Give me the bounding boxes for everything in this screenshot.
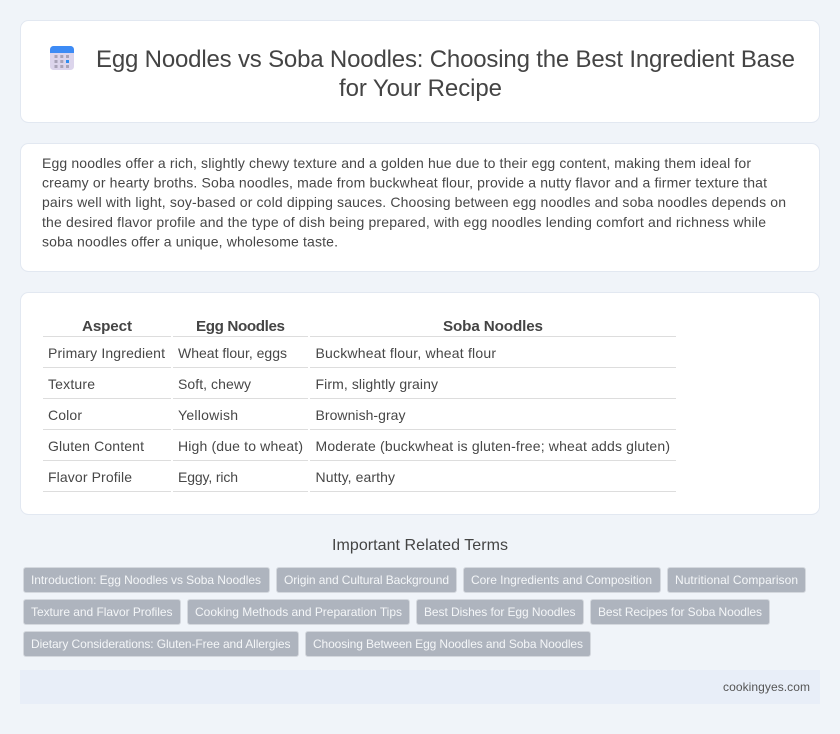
table row: flavor profile (43, 469, 676, 492)
tag (590, 600, 770, 624)
table row: primary ingredient: Primary Ingredient (48, 345, 165, 361)
table row: color (43, 407, 676, 430)
footer (20, 670, 820, 704)
tag (188, 600, 410, 624)
panel: comparison table (20, 292, 820, 514)
table row: flavor profile: Nutty, earthy (316, 469, 395, 485)
table row: gluten content: High (due to wheat) (178, 438, 303, 454)
table header: Egg Noodles (196, 318, 285, 335)
title: Egg Noodles vs Soba Noodles: Choosing the Best Ingredient Base (96, 46, 795, 73)
table row: gluten content: Moderate (buckwheat is gluten-free; wheat adds gluten) (316, 438, 670, 454)
table header: Soba Noodles (443, 318, 543, 335)
tag: Best Recipes for Soba Noodles (598, 605, 762, 619)
tag: Cooking Methods and Preparation Tips (195, 605, 402, 619)
table header (43, 318, 676, 337)
tag (464, 568, 660, 592)
table row: flavor profile: Flavor Profile (48, 469, 132, 485)
table row: gluten content (43, 438, 676, 461)
table row: primary ingredient: Wheat flour, eggs (178, 345, 287, 361)
title: for Your Recipe (339, 75, 502, 102)
table row: color: Brownish-gray (316, 407, 406, 423)
tag: Choosing Between Egg Noodles and Soba Noodles (313, 637, 583, 651)
tag: Core Ingredients and Composition (471, 573, 652, 587)
text block: introduction paragraph: the desired flavor profile and the type of dish being prepared, with egg noodles lending comfort and richness while (42, 214, 766, 230)
table row: texture (43, 376, 676, 399)
title (96, 46, 795, 102)
tag: Origin and Cultural Background (284, 573, 449, 587)
text block: introduction paragraph: soba noodles offer a unique, wholesome taste. (42, 233, 338, 249)
tag (416, 600, 584, 624)
tags: related terms (24, 568, 806, 656)
heading: related terms: Important Related Terms (332, 537, 508, 554)
table row: gluten content: Gluten Content (48, 438, 144, 454)
table row: texture: Soft, chewy (178, 376, 251, 392)
table header: Aspect (82, 318, 132, 335)
panel: introduction (20, 144, 820, 272)
table row: primary ingredient (43, 345, 676, 368)
tag (24, 600, 180, 624)
panel: header (20, 20, 820, 122)
tag (24, 632, 298, 656)
tag: Dietary Considerations: Gluten-Free and Allergies (31, 637, 290, 651)
table row: color: Color (48, 407, 82, 423)
text block: introduction paragraph: Egg noodles offer a rich, slightly chewy texture and a golden hue due to their egg content, making them ideal for (42, 155, 751, 171)
tag (24, 568, 270, 592)
table row: texture: Texture (48, 376, 95, 392)
table row: color: Yellowish (178, 407, 238, 423)
tag: Texture and Flavor Profiles (31, 605, 172, 619)
tag: Best Dishes for Egg Noodles (424, 605, 576, 619)
table row: primary ingredient: Buckwheat flour, wheat flour (316, 345, 496, 361)
text block: introduction paragraph (42, 155, 786, 249)
tag: Nutritional Comparison (675, 573, 798, 587)
tag: Introduction: Egg Noodles vs Soba Noodles (31, 573, 261, 587)
tag (306, 632, 590, 656)
icon: calendar grid (50, 46, 74, 70)
text block: introduction paragraph: pairs well with light, soy-based or cold dipping sauces. Choosing between egg noodles and soba noodles depends on (42, 194, 786, 210)
tag (276, 568, 456, 592)
footer: cookingyes.com (723, 680, 810, 694)
text block: introduction paragraph: creamy or hearty broths. Soba noodles, made from buckwheat flour, provide a nutty flavor and a firmer texture that (42, 175, 767, 191)
table row: flavor profile: Eggy, rich (178, 469, 238, 485)
table row: texture: Firm, slightly grainy (316, 376, 438, 392)
tag (668, 568, 806, 592)
